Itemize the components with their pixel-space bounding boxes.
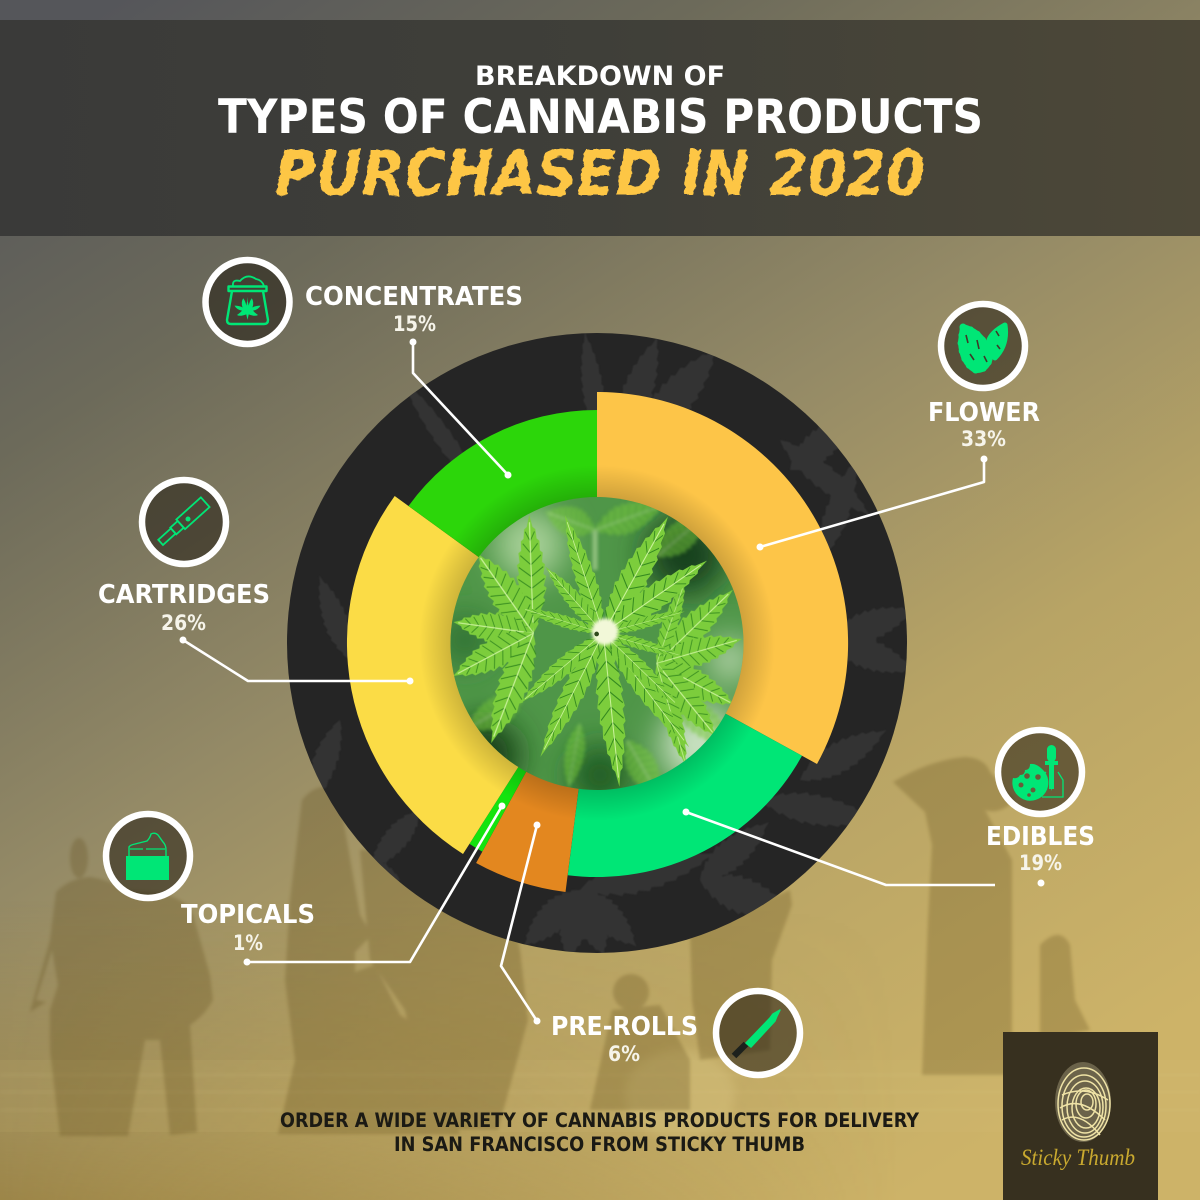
label: concentrates 15% [305,282,523,336]
segment: edibles 19% [568,710,802,877]
title line: types of cannabis products: TYPES OF CANNABIS PRODUCTS [218,90,983,145]
label: flower 33% [928,398,1040,451]
label: topicals 1%: TOPICALS [181,900,315,930]
label: edibles 19%: 19% [1019,851,1062,875]
label: flower 33%: FLOWER [928,398,1040,428]
label: pre-rolls 6%: PRE-ROLLS [551,1012,698,1042]
donut chart [287,330,920,962]
label: cartridges 26% [98,580,270,635]
segment: cartridges 26% [347,496,522,854]
label: pre-rolls 6%: 6% [608,1042,640,1066]
title line: breakdown of: BREAKDOWN OF [475,61,725,92]
icon: cartridges vape pen [142,480,226,564]
callout line: pre-rolls [501,822,540,1024]
label: topicals 1% [181,900,315,955]
label: topicals 1%: 1% [233,931,263,955]
center photo: cannabis plant [450,497,744,790]
footer call to action: ORDER A WIDE VARIETY OF CANNABIS PRODUCTS FOR DELIVERY [280,1109,920,1132]
callout line: edibles [682,808,1044,886]
dark outer ring with leaf texture [287,330,920,962]
label: edibles 19%: EDIBLES [986,822,1095,852]
logo: sticky thumb [1003,1032,1158,1200]
callout line: topicals [244,802,506,966]
label: concentrates 15%: 15% [393,312,436,336]
logo wordmark: Sticky Thumb [1021,1145,1135,1170]
label: pre-rolls 6% [551,1012,698,1066]
callout line: flower [756,456,988,550]
segment: flower 33% [597,392,848,764]
icon: pre-roll joint [716,991,800,1075]
footer call to action: IN SAN FRANCISCO FROM STICKY THUMB [394,1133,805,1156]
label: cartridges 26%: 26% [161,611,206,635]
icon: concentrates bag [206,260,290,344]
title banner [0,20,1200,236]
icon: topicals cream jar [106,814,190,898]
callout line: cartridges [180,636,414,684]
segment: pre-rolls 6% [476,766,580,892]
logo fingerprint [1055,1062,1111,1142]
title line: purchased in 2020: PURCHASED IN 2020 [275,137,925,210]
label: cartridges 26%: CARTRIDGES [98,580,270,610]
label: flower 33%: 33% [961,427,1006,451]
icon: edibles cookie and dropper [998,730,1082,814]
label: concentrates 15%: CONCENTRATES [305,282,523,312]
label: edibles 19% [986,822,1095,875]
segment: topicals 1% [470,761,530,852]
footer call to action [280,1109,920,1156]
segment: concentrates 15% [408,410,597,561]
callout line: concentrates [410,338,512,478]
icon: flower buds [941,304,1025,388]
